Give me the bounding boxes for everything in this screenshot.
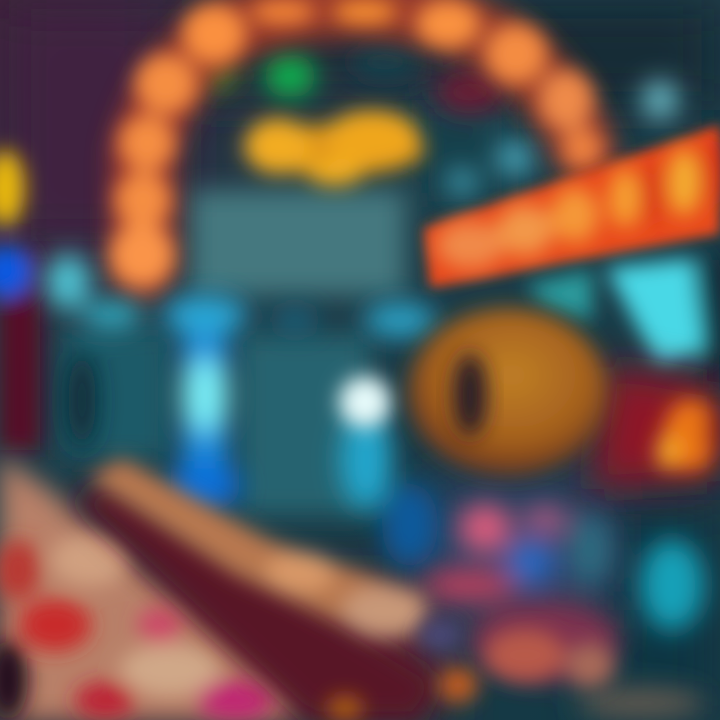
foreground small lights bbox=[327, 619, 614, 720]
right cyan glow panels bbox=[525, 258, 720, 390]
foreground tan bar bbox=[88, 458, 427, 638]
orange lit sign banner bbox=[424, 125, 720, 288]
large golden ball bbox=[408, 308, 608, 476]
upper arch interior details bbox=[204, 44, 678, 196]
arch of orange lights bbox=[110, 0, 602, 287]
left edge lights bbox=[0, 150, 40, 450]
cyan lights and column bbox=[46, 254, 438, 567]
foreground dark red rail bbox=[72, 480, 440, 720]
golden cluster at top of arch bbox=[244, 110, 425, 186]
red glow behind arch lights bbox=[142, 6, 585, 270]
bright white glow bbox=[339, 376, 391, 428]
lower right floor lights bbox=[424, 504, 705, 719]
foreground pink table with red dots bbox=[0, 455, 295, 720]
teal panel behind arch bbox=[60, 100, 510, 515]
dark red machine and orange light at right bbox=[590, 365, 720, 490]
